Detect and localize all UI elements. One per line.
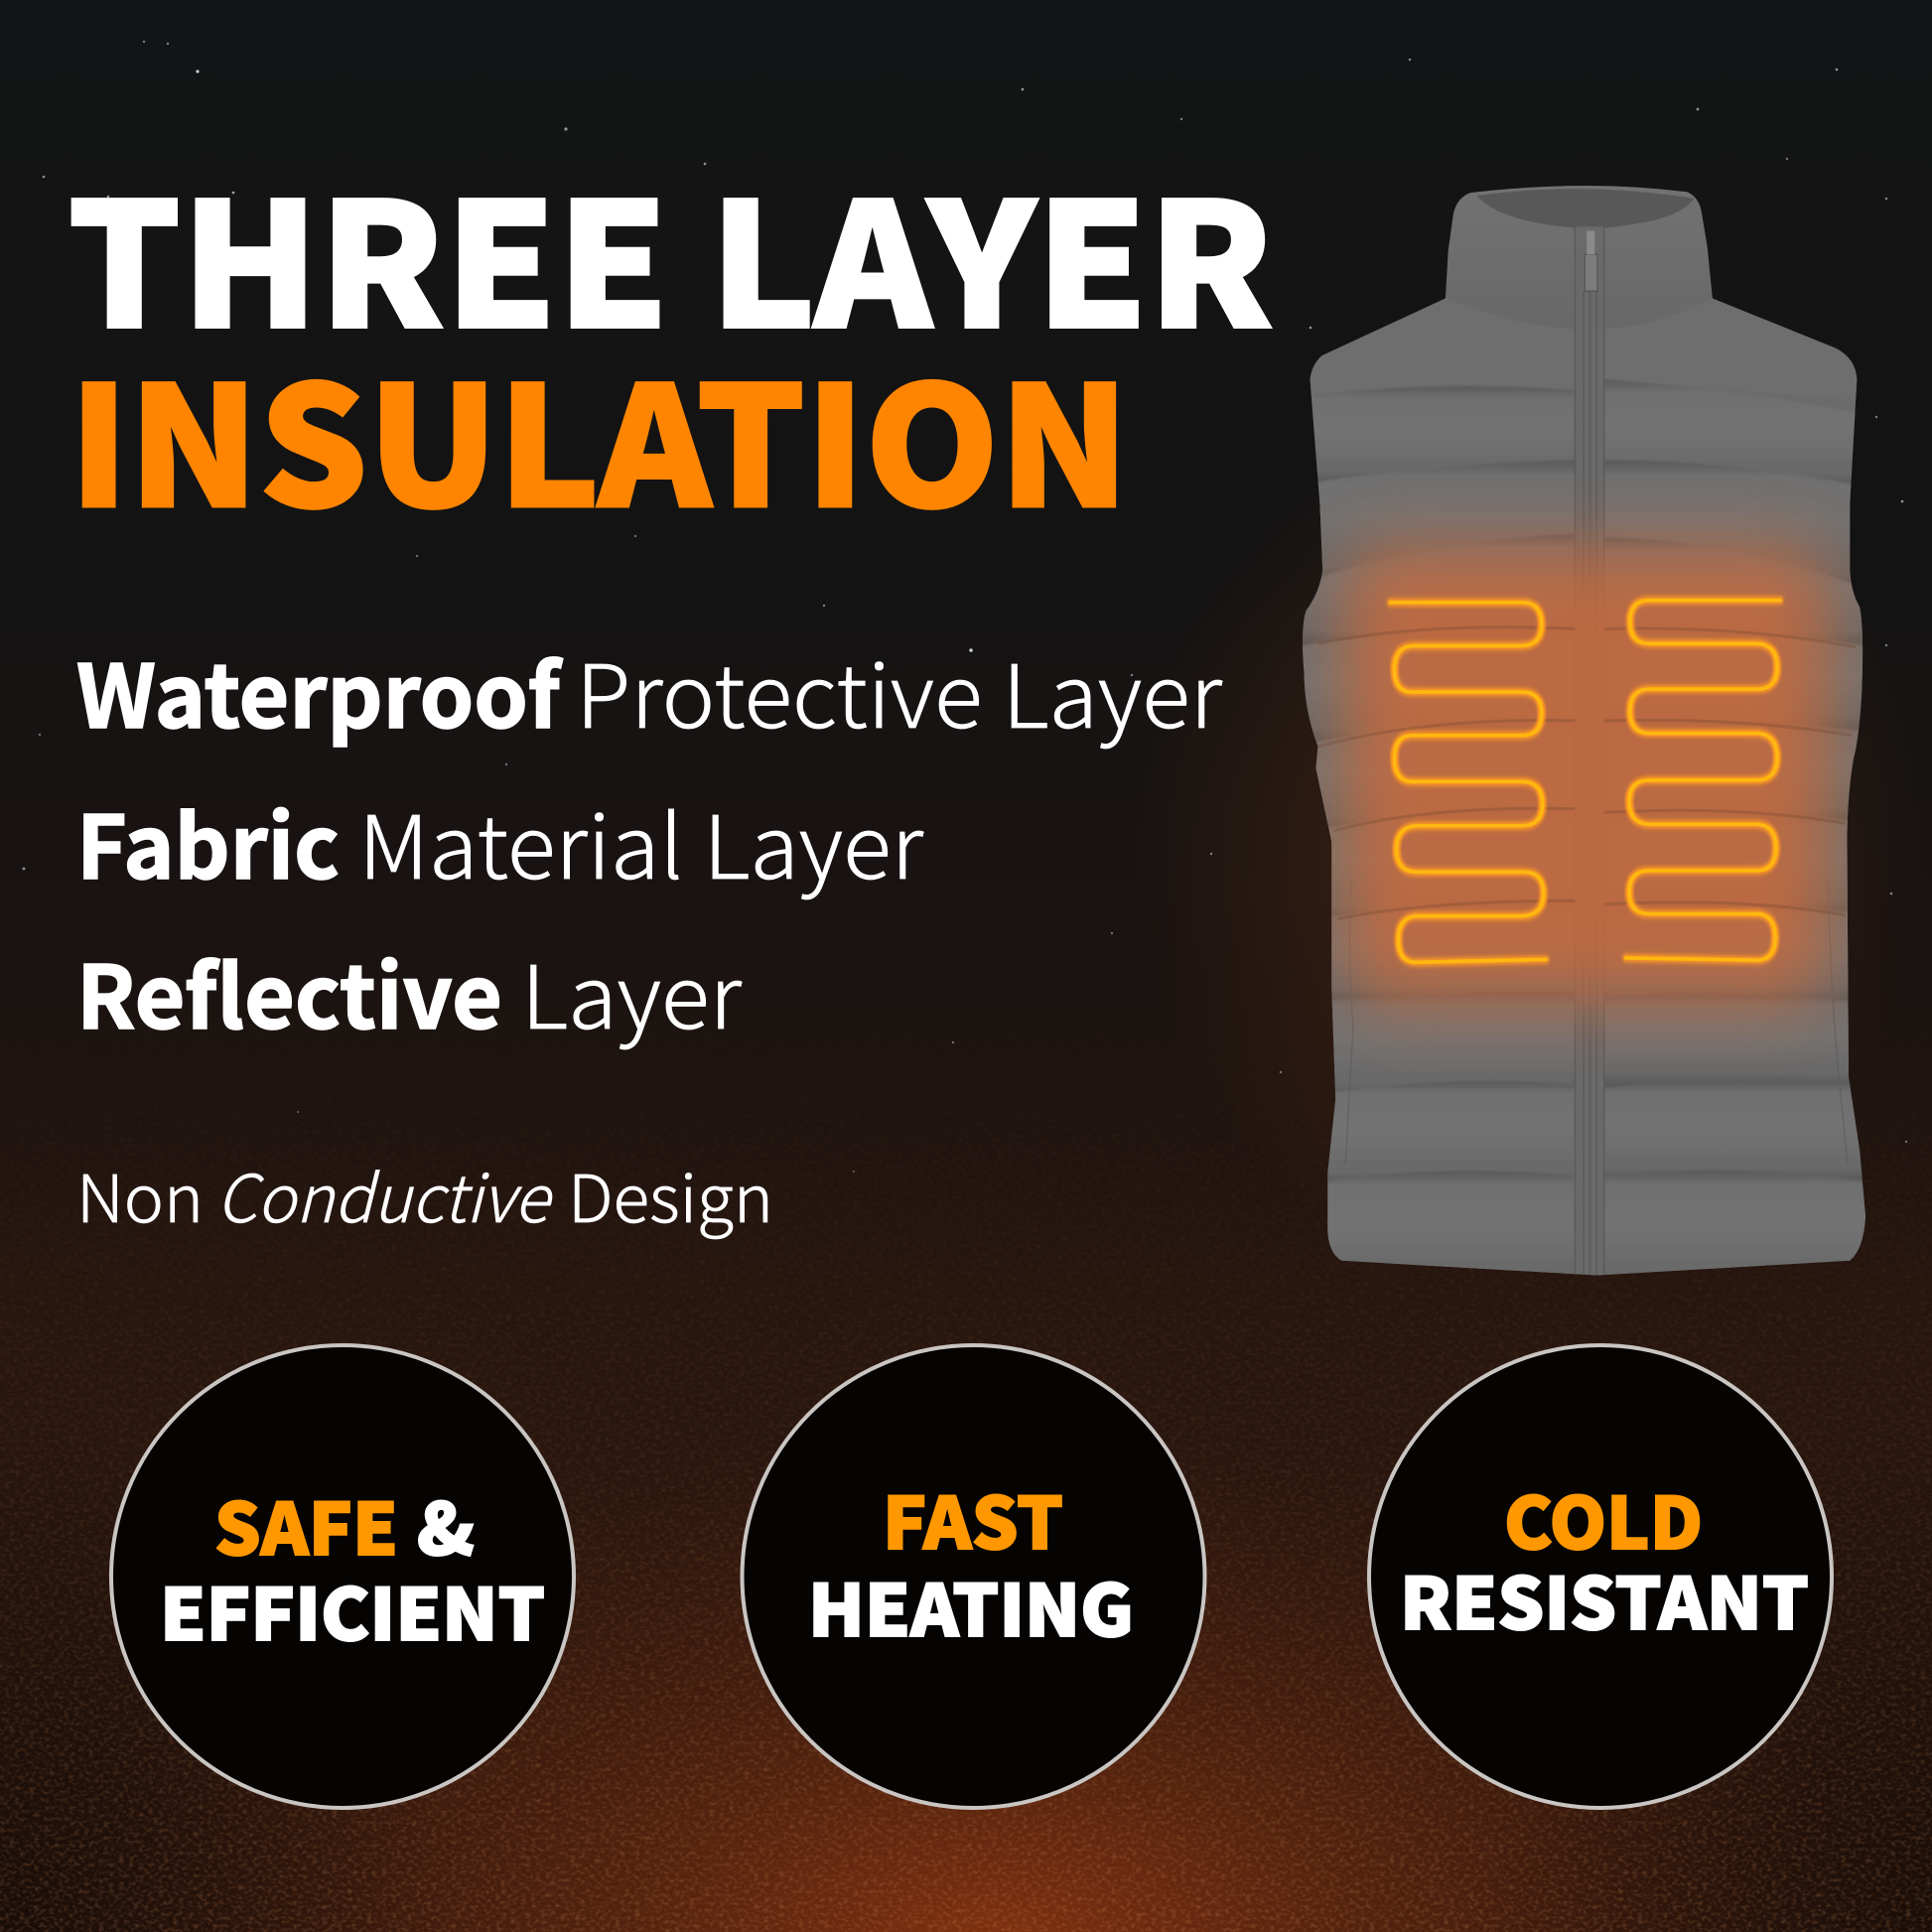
badge: safe and efficient: SAFE [214,1471,398,1576]
badge: cold resistant: RESISTANT [1400,1546,1809,1650]
title line: THREE LAYER: THREE LAYER [68,127,1274,377]
badge: fast heating [743,1345,1205,1808]
badge: cold resistant: COLD [1504,1465,1703,1570]
heating wire left [1391,603,1546,962]
layer: waterproof [76,627,1222,754]
tagline: non conductive design: Non [76,1147,204,1242]
vest body [1295,174,1875,1290]
vest illustration [1295,174,1875,1290]
layer: fabric: Material Layer [358,778,923,904]
layer: waterproof: Waterproof [76,627,563,754]
badge: cold resistant [1369,1345,1832,1808]
title line: INSULATION: INSULATION [69,315,1130,555]
badge: safe and efficient: & [417,1471,475,1576]
title [68,127,1274,555]
tagline: non conductive design: Design [568,1147,773,1242]
badge: safe and efficient: EFFICIENT [160,1557,545,1661]
layer: fabric [76,778,923,904]
heat glow [1345,548,1828,1004]
layer: waterproof: Protective Layer [576,627,1222,754]
collar [1446,186,1713,298]
badge: fast heating: HEATING [808,1553,1134,1657]
layer: reflective [76,928,742,1054]
tagline: non conductive design [76,1147,773,1242]
layer list [76,627,1222,1054]
badge: fast heating: FAST [883,1465,1063,1570]
tagline: non conductive design: Conductive [216,1147,554,1242]
layer: reflective: Reflective [76,928,502,1054]
layer: reflective: Layer [521,928,742,1054]
seams over glow [1317,627,1856,919]
layer: fabric: Fabric [76,778,340,904]
pocket zips [1344,929,1849,1166]
heating wire right [1626,601,1780,960]
zipper [1574,226,1604,1277]
badge: safe and efficient [111,1345,574,1808]
